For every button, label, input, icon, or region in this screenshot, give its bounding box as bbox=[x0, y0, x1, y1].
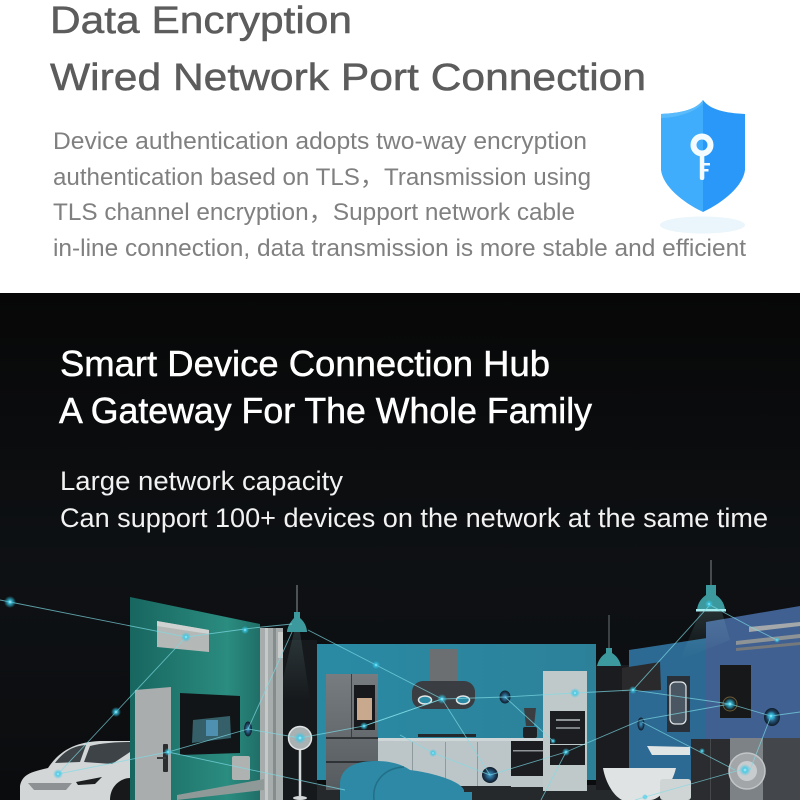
toilet bbox=[603, 768, 691, 800]
tall oven cabinet bbox=[543, 671, 587, 791]
heading: data encryption: Data Encryption bbox=[50, 0, 352, 42]
dark section background bbox=[0, 293, 800, 800]
dark back panels bbox=[283, 640, 629, 800]
encryption description text: authentication based on TLS，Transmission using bbox=[53, 164, 591, 191]
fan bbox=[288, 726, 312, 800]
heading: data encryption bbox=[50, 0, 646, 99]
sofa bbox=[340, 761, 472, 800]
wall TV bbox=[180, 693, 240, 755]
white top section background bbox=[0, 0, 800, 293]
car bbox=[20, 741, 130, 800]
slate blue wall bbox=[706, 606, 800, 800]
icon: blue shield with key bbox=[660, 100, 745, 234]
encryption description text: in-line connection, data transmission is more stable and efficient bbox=[53, 235, 746, 262]
heading: data encryption: Wired Network Port Connection bbox=[50, 57, 646, 99]
encryption description text bbox=[53, 128, 746, 262]
heading: smart device connection hub: A Gateway For The Whole Family bbox=[59, 390, 592, 431]
dark cabinets bbox=[691, 739, 730, 800]
drying rack bbox=[736, 622, 800, 651]
heading: smart device connection hub bbox=[59, 343, 592, 431]
smart mirror bbox=[667, 676, 690, 732]
smart home scene bbox=[0, 560, 800, 800]
network nodes bbox=[4, 596, 780, 800]
heading: smart device connection hub: Smart Device Connection Hub bbox=[60, 343, 550, 384]
air conditioner bbox=[157, 621, 209, 652]
wall heater bbox=[622, 662, 661, 692]
smart sensor orbs bbox=[244, 690, 780, 783]
curtain bbox=[260, 628, 283, 800]
network capacity text: Can support 100+ devices on the network at the same time bbox=[60, 503, 768, 533]
lamp middle bbox=[597, 615, 621, 666]
TV console with purifier bbox=[177, 756, 264, 800]
bathroom sink bbox=[647, 746, 690, 755]
washing machine bbox=[729, 738, 800, 800]
encryption description text: Device authentication adopts two-way encryption bbox=[53, 128, 587, 155]
floor bbox=[130, 785, 800, 800]
network connection lines bbox=[0, 600, 800, 800]
range hood bbox=[412, 649, 475, 709]
encryption description text: TLS channel encryption，Support network cable bbox=[53, 199, 575, 226]
network capacity text bbox=[60, 466, 768, 533]
lamp left bbox=[278, 585, 310, 700]
lamp right bbox=[680, 560, 730, 660]
bathroom blue wall bbox=[629, 638, 707, 790]
kitchen counter and cabinets bbox=[378, 734, 550, 787]
fridge bbox=[326, 674, 378, 790]
blender bbox=[523, 708, 537, 738]
teal kitchen wall bbox=[317, 644, 596, 780]
network capacity text: Large network capacity bbox=[60, 466, 343, 496]
water heater bbox=[720, 665, 751, 718]
door bbox=[135, 687, 171, 800]
green living room wall bbox=[130, 597, 260, 800]
